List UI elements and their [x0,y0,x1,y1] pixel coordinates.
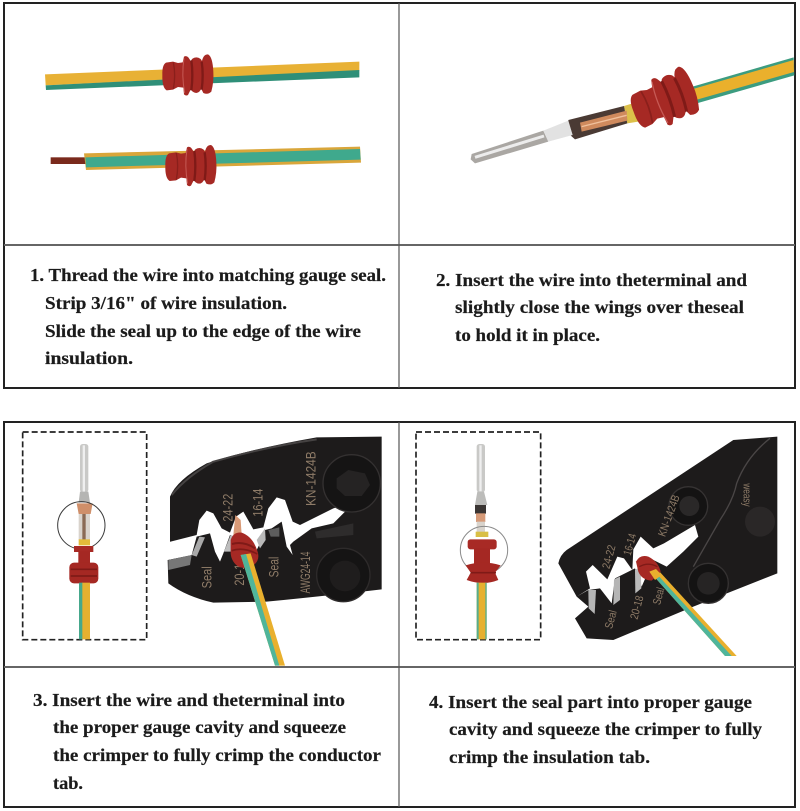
crimper markings: KN-1424B [302,451,318,506]
crimper markings: Seal [603,609,620,630]
crimper markings: Seal [266,557,282,577]
step 2 text [436,270,747,345]
magnifier circle [58,502,105,549]
wire and seal in crimper [231,515,285,666]
crimper markings: KN-1424B [657,494,683,538]
crimper markings: 20-18 [231,558,247,586]
bolt: lower [317,548,370,602]
bolt: upper [669,487,708,525]
step 2 text: slightly close the wings over theseal [455,297,744,317]
terminal detail [475,444,488,537]
panel: top steps frame [4,3,795,388]
step 1 text: insulation. [45,348,133,368]
crimper markings: Seal [198,566,214,588]
step 1 text: 1. Thread the wire into matching gauge seal. [30,265,386,285]
step 3 text: 3. Insert the wire and theterminal into [33,690,345,710]
seal [624,64,703,136]
wire detail [477,583,487,639]
step 3 text [33,690,381,793]
image: wires threaded through seals [45,54,361,186]
step 1 text: Slide the seal up to the edge of the wire [45,321,361,341]
crimper jaw opening [577,525,698,603]
step 4 text: cavity and squeeze the crimper to fully [449,719,762,739]
magnifier circle [460,526,508,574]
image: terminal on wire with seal [471,57,794,163]
crimper tool [558,437,777,640]
terminal: pin and wings [471,106,627,163]
crimper markings [601,483,752,630]
seal: upper wire [162,54,213,96]
image: step 4 detail and crimper [416,432,777,656]
crimper markings: 16-14 [249,489,265,517]
crimper markings: 16-14 [622,532,639,557]
step 3 text: the proper gauge cavity and squeeze [53,717,346,737]
bolt: lower [688,563,728,603]
wire: yellow and green upper [45,62,359,90]
crimper tool [167,437,382,603]
crimper markings: 24-22 [601,544,618,570]
step 3 text: tab. [53,773,83,793]
wire: yellow and green [624,57,794,123]
step 4 text: 4. Insert the seal part into proper gauge [429,692,752,712]
step 4 text: crimp the insulation tab. [449,747,650,767]
step 2 text: 2. Insert the wire into theterminal and [436,270,747,290]
crimper markings: Seal [651,586,667,606]
step 4 text [429,692,762,767]
bolt: middle [745,507,775,537]
bolt: upper [323,455,380,512]
crimper markings: AWG24-14 [297,552,313,593]
seal: lower wire [165,145,216,186]
wire and seal in crimper [636,556,737,656]
wire: stripped lower [51,147,361,170]
step 3 text: the crimper to fully crimp the conductor [53,745,381,765]
terminal detail [77,444,93,545]
crimper markings: 20-18 [629,594,646,621]
seal detail [69,546,98,583]
crimper markings: weasy [740,483,752,507]
step 1 text: Strip 3/16" of wire insulation. [45,293,287,313]
wire detail [79,583,90,639]
crimper jaw opening [167,497,348,562]
panel: bottom steps frame [4,422,795,807]
dashed detail box [23,432,147,640]
crimper markings [198,451,318,593]
crimper markings: 24-22 [219,494,235,522]
step 2 text: to hold it in place. [455,325,600,345]
step 1 text [30,265,386,368]
seal detail [466,539,501,583]
dashed detail box [416,432,541,640]
image: step 3 detail and crimper [23,432,382,666]
